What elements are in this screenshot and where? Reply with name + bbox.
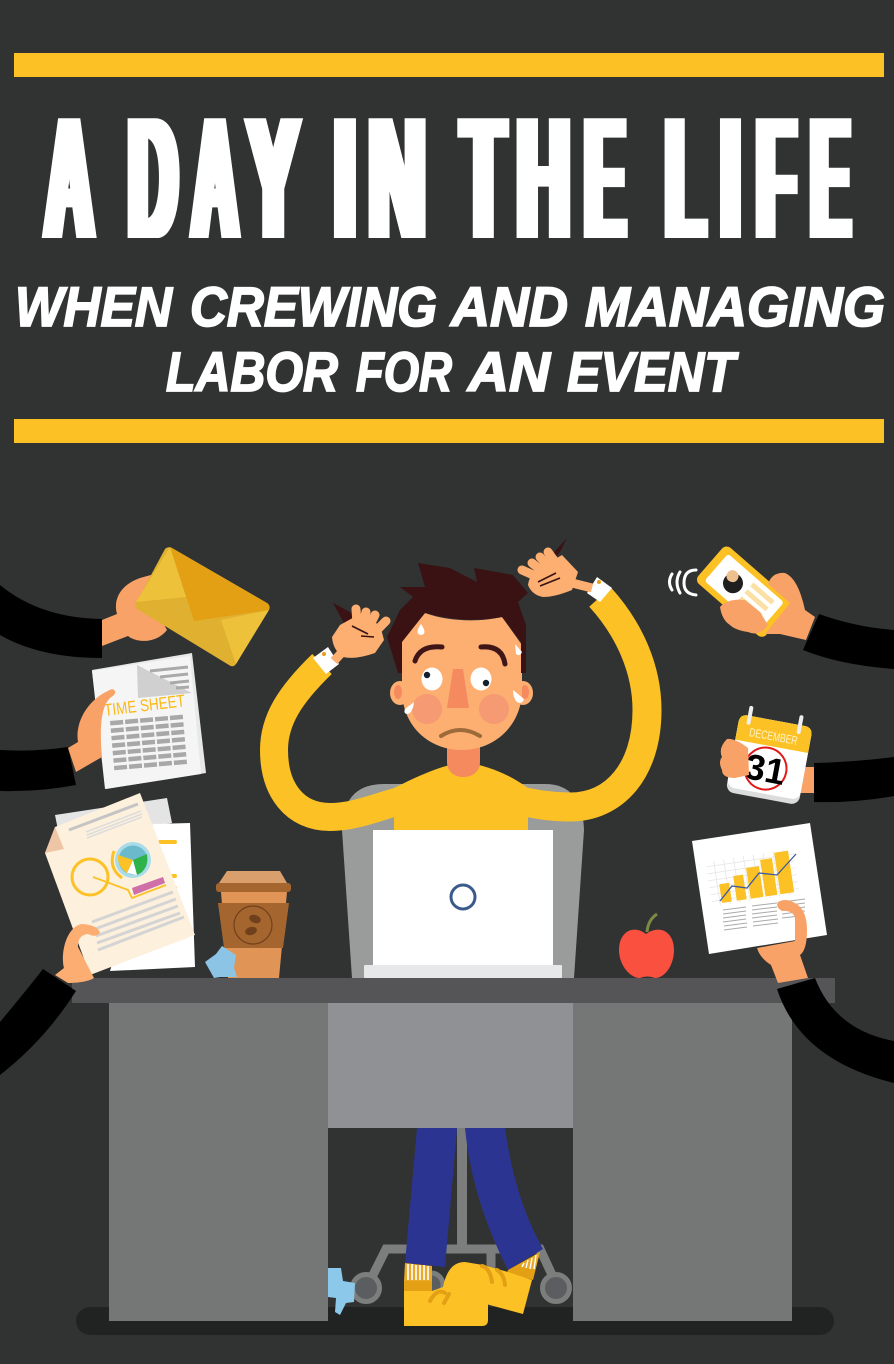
neck (447, 745, 480, 777)
arm and hand with calendar (720, 706, 894, 805)
desk (72, 978, 835, 1321)
legs and shoes (404, 1128, 543, 1326)
laptop (364, 830, 562, 978)
subtitle: LABOR (166, 340, 338, 403)
title: A (192, 80, 238, 275)
eyebrows (415, 647, 505, 664)
subtitle: AN (466, 340, 552, 403)
crumpled paper under desk (328, 1268, 355, 1315)
top yellow bar (14, 53, 884, 77)
bar chart (706, 849, 799, 906)
title: H (517, 80, 570, 275)
sweat drops (404, 624, 524, 714)
subtitle: FOR (356, 340, 452, 403)
title: L (666, 80, 705, 275)
icon: calendar (726, 706, 814, 805)
chart paper (692, 823, 827, 954)
subtitle: CREWING (190, 275, 437, 338)
subtitle: AND (449, 275, 568, 338)
hand pulling hair right (522, 538, 592, 597)
arm and hand with envelope (0, 547, 270, 666)
arm and hand with phone (695, 544, 894, 669)
subtitle: WHEN (15, 275, 173, 338)
arm and hand with time sheet (0, 653, 206, 791)
title: Y (248, 80, 298, 275)
title: E (585, 80, 625, 275)
title: A (46, 80, 92, 275)
eyes (422, 668, 492, 690)
title: F (757, 80, 795, 275)
crumpled paper on desk (205, 946, 237, 978)
time sheet (92, 653, 206, 789)
icon: coffee cup (216, 871, 291, 978)
time sheet table (110, 715, 187, 770)
chair (342, 784, 584, 1302)
cuffs (313, 577, 612, 674)
arm and hand with chart (692, 823, 894, 1083)
hand pulling hair left (332, 603, 386, 661)
title: N (369, 80, 425, 275)
title: I (334, 80, 356, 275)
icon: calendar: DECEMBER (748, 725, 799, 748)
icon: apple (619, 914, 674, 978)
time sheet: TIME SHEET (103, 691, 186, 720)
icon: phone (695, 544, 794, 639)
title: D (129, 80, 177, 275)
subtitle: EVENT (567, 340, 739, 403)
icon: phone sound waves (670, 570, 696, 595)
pie chart (112, 842, 151, 878)
head (387, 563, 533, 750)
icon: calendar: 31 (742, 745, 789, 793)
stack of report papers with hand (0, 793, 195, 1075)
hair (387, 563, 528, 673)
torso and sweater arms (274, 597, 647, 830)
title: T (462, 80, 505, 275)
cheeks (412, 694, 509, 724)
mouth (441, 730, 480, 736)
nose (447, 669, 469, 708)
subtitle (15, 275, 885, 403)
icon: envelope (135, 547, 270, 666)
subtitle: MANAGING (585, 275, 885, 338)
floor shadow (76, 1307, 834, 1335)
title: I (721, 80, 740, 275)
bottom yellow bar (14, 419, 884, 443)
